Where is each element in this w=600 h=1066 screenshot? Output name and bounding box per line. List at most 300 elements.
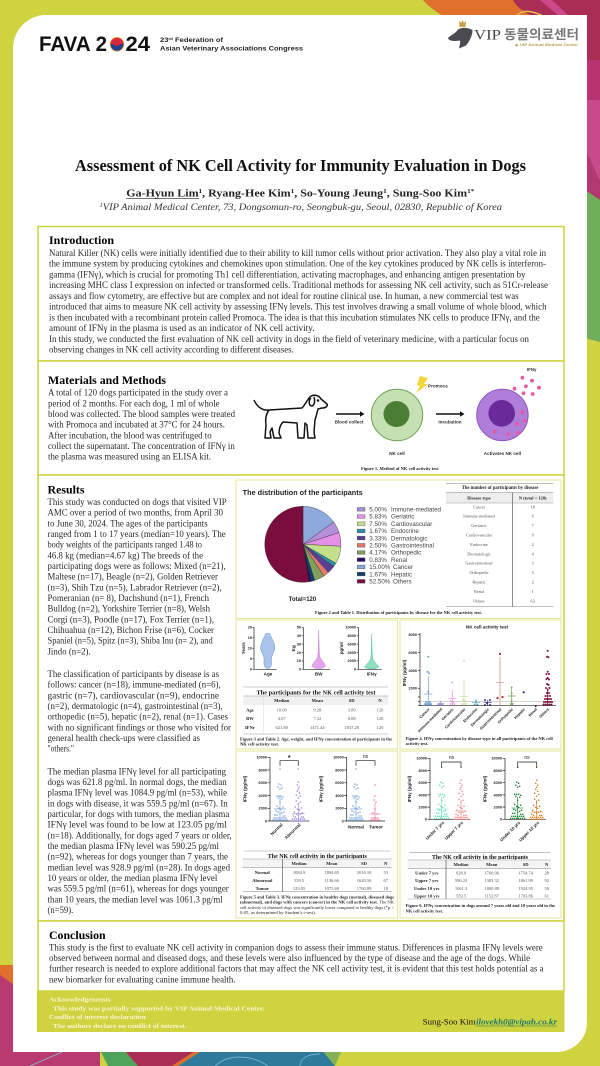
- table 2: participants: 9.28: [313, 707, 322, 712]
- authors: 1: [383, 188, 387, 195]
- table 4: NK cell activity by age: 928.9: [456, 870, 467, 875]
- dot plot: under vs upper 10 years: Under 10 yrs: [499, 820, 522, 843]
- legend: Others: [393, 578, 412, 586]
- table 1: participants by disease: Geriatric: [471, 523, 487, 528]
- violin chart: age: 0: [250, 668, 252, 672]
- icon: dog outline: [254, 395, 327, 438]
- table 3: NK cell activity: Median: [291, 861, 307, 866]
- dot plot: under vs upper 7 years: ns: [449, 755, 455, 761]
- violin chart: IFN gamma: 4000: [348, 651, 356, 655]
- text block: introduction: gamma (IFNγ), which is crucial for promoting Th1 cell differentiation, activating macrophages, and enhancing antigen presentation by: [49, 270, 526, 280]
- table 3: NK cell activity: N: [384, 861, 388, 866]
- table 4: NK cell activity by age: 559.5: [456, 893, 467, 898]
- table 3: NK cell activity: 1136.66: [324, 878, 340, 883]
- dot plot: under vs upper 10 years: 2000: [494, 806, 502, 810]
- table 3: NK cell activity: 1894.65: [324, 870, 340, 875]
- text block: disease classification: general health check-ups were classified as: [48, 733, 200, 743]
- violin chart: body weight: Kg: [291, 645, 296, 651]
- table 1: participants by disease: 9: [532, 532, 534, 538]
- text block: median IFN gamma: (n=18). Additionally, for dogs aged 7 years or older,: [48, 830, 232, 840]
- arrow: incubation: [436, 411, 464, 424]
- table 1: participants by disease: Cancer: [473, 504, 486, 509]
- caption: figure 3: [240, 737, 392, 746]
- table 1: participants by disease: 3: [532, 561, 534, 566]
- table 3: NK cell activity: [243, 851, 392, 892]
- text block: median IFN gamma: The median plasma IFNγ level for all participating: [48, 766, 226, 776]
- logo: FAVA 2024 congress: Federation of: [173, 37, 224, 44]
- table 4: NK cell activity by age: 1703.86: [518, 893, 534, 898]
- text block: study population: 46.8 kg (median=4.67 kg) The breeds of the: [48, 550, 203, 560]
- text block: median IFN gamma: 10 years or older, the median plasma IFNγ level: [48, 873, 218, 883]
- text block: conclusion: further research is needed to explore additional factors that may affect the NK cell activity test, it is evident that this test holds potential as a: [49, 964, 544, 974]
- dot plot: under vs upper 7 years: 8000: [419, 769, 427, 773]
- violin chart: age: Age: [264, 672, 273, 676]
- icon: promoca lightning: [416, 376, 448, 393]
- dot plot: disease types: Immune-mediated: [417, 707, 444, 733]
- legend: Renal: [391, 557, 407, 564]
- table 3: NK cell activity: 18: [383, 886, 389, 891]
- table 4: NK cell activity by age: The NK cell activity in the participants: [432, 855, 529, 861]
- panel: age groups: [400, 751, 561, 918]
- table 1: participants by disease: 4: [532, 551, 535, 556]
- text block: median IFN gamma: (n=92), whereas for dogs younger than 7 years, the: [48, 852, 228, 862]
- table 1: participants by disease: Gastrointestinal: [465, 561, 493, 566]
- pie total label: Total=120: [289, 597, 317, 603]
- table 2: participants: 120: [377, 707, 384, 712]
- violin chart: IFN gamma: 0: [354, 668, 356, 672]
- legend: Gastrointestinal: [391, 542, 434, 550]
- panel: introduction: [38, 226, 564, 361]
- dot plot: under vs upper 10 years: Upper 10 yrs: [518, 820, 541, 843]
- violin chart: age: 10: [248, 647, 252, 651]
- text block: disease classification: follows: cancer (n=18), immune-mediated (n=6),: [48, 680, 221, 690]
- text block: introduction: the immune system by producing cytokines and chemokines upon stimulation. One of the key cytokines produced by NK cells is interferon-: [49, 259, 546, 269]
- title: Assessment of NK Cell Activity for Immunity Evaluation in Dogs: [75, 156, 527, 175]
- table 2: participants: Mean: [312, 698, 323, 703]
- text block: study population: participating dogs were as follows: Mixed (n=21),: [48, 561, 226, 571]
- dot plot: normal vs tumor: 6000: [335, 781, 344, 785]
- legend: 5.83%: [369, 514, 387, 521]
- dot plot: normal vs abnormal: 6000: [259, 781, 267, 785]
- table 1: participants by disease: Immune-mediated: [463, 514, 496, 519]
- dot plot: normal vs abnormal: 2000: [259, 807, 267, 811]
- caption: figure 5: Figure 5 and Table 3. IFNγ concentration in healthy dogs (normal), diseased dogs: [240, 896, 395, 900]
- contact: ilovekh0@vipah.co.kr: [476, 1016, 558, 1026]
- authors: 1*: [467, 188, 474, 195]
- logo: VIP animal medical center: [448, 20, 579, 48]
- table 1: participants by disease: Cardiovascular: [466, 532, 493, 538]
- legend: [357, 506, 442, 586]
- caption: figure 4: activity test.: [406, 742, 428, 746]
- logo: FAVA 2024 congress: rd: [168, 36, 174, 41]
- table 1: participants by disease: Hepatic: [472, 580, 486, 584]
- table 1: participants by disease: 6: [532, 514, 535, 519]
- icon: dog head with crown: [448, 20, 472, 48]
- text block: median IFN gamma: plasma IFNγ level was 1084.9 pg/ml (n=53), while: [48, 788, 227, 798]
- icon: activated NK cell: Activates NK cell: [484, 451, 521, 456]
- arrow: blood collect: [335, 411, 364, 424]
- dot plot: under vs upper 10 years: 4000: [494, 793, 502, 797]
- caption: figure 6: [406, 904, 555, 913]
- dot plot: under vs upper 10 years: ns: [524, 755, 530, 761]
- table 4: NK cell activity by age: Upper 7 yrs: [415, 878, 438, 883]
- dot plot: under vs upper 7 years: 2000: [419, 806, 427, 810]
- dot plot: normal vs tumor: IFNγ (pg/ml): [319, 775, 324, 802]
- violin chart: age: 15: [248, 636, 252, 640]
- legend: 1.67%: [369, 528, 387, 535]
- table 3: NK cell activity: 1760.89: [357, 886, 372, 891]
- text block: median IFN gamma: particular, for dogs with tumors, the median plasma: [48, 809, 229, 819]
- text block: disease classification: with no significant findings or those who visited for: [48, 722, 231, 732]
- text block: introduction: assays and flow cytometry, are effective but are complex and not ideal for routine clinical use. In human, a new commercial test was: [49, 291, 519, 301]
- panel: conclusion: [38, 921, 564, 991]
- text block: study population: (n=3), Shih Tzu (n=5), Labrador Retriever (n=2),: [48, 582, 222, 592]
- authors: , Ryang-Hee Kim: [202, 188, 291, 200]
- contact: [423, 1016, 558, 1026]
- dot plot: disease types: Others: [539, 707, 550, 719]
- table 2: participants: SD: [349, 698, 355, 703]
- table 3: NK cell activity: 559.5: [294, 878, 305, 883]
- table 1: participants by disease: Others: [473, 598, 485, 603]
- affiliation: VIP Animal Medical Center, 73, Dongsomun-ro, Seongbuk-gu, Seoul, 02830, Republic of Korea: [103, 202, 502, 213]
- caption: figure 1: Figure 1. Method of NK cell activity test: [361, 467, 439, 471]
- pie chart: [265, 506, 341, 582]
- dot plot: disease types: 4000: [409, 669, 417, 673]
- text block: disease classification: orthopedic (n=5), hepatic (n=2), renal (n=1). Cases: [48, 712, 228, 722]
- text block: median IFN gamma: IFNγ level was found to be low at 123.05 pg/ml: [48, 820, 227, 830]
- table 2: participants: 4.67: [278, 716, 286, 721]
- table 1: participants by disease: Endocrine: [470, 542, 488, 547]
- text block: disease classification: (n=2), dermatologic (n=4), gastrointestinal (n=3),: [48, 701, 223, 711]
- legend: 7.50%: [369, 521, 387, 528]
- text block: conclusion: This study is the first to evaluate NK cell activity in companion dogs to assess their immune status. Differences in plasma IFNγ levels were: [49, 942, 543, 952]
- text block: methods: [48, 388, 235, 462]
- affiliation: 1: [100, 203, 103, 209]
- legend: Geriatric: [391, 514, 414, 521]
- table 4: NK cell activity by age: 1760.96: [484, 870, 500, 875]
- table 4: NK cell activity by age: [408, 852, 551, 899]
- text block: disease classification: [48, 669, 231, 754]
- dot plot: under vs upper 10 years: [483, 755, 546, 843]
- text block: median IFN gamma: was 559.5 pg/ml (n=61), whereas for dogs younger: [48, 884, 229, 894]
- violin chart: IFN gamma: [339, 626, 382, 676]
- legend: Immune-mediated: [391, 506, 442, 514]
- table 2: participants: BW: [246, 716, 254, 721]
- violin chart: body weight: 50: [297, 626, 301, 630]
- icon: promoca lightning: Promoca: [428, 383, 448, 388]
- table 2: participants: 1837.28: [344, 725, 360, 730]
- table 4: NK cell activity by age: Median: [453, 862, 469, 867]
- table 3: NK cell activity: 2016.10: [357, 870, 372, 875]
- heading: introduction: Introduction: [49, 235, 115, 247]
- dot plot: under vs upper 10 years: 6000: [494, 781, 502, 785]
- table 1: participants by disease: N (total = 120): [519, 496, 547, 500]
- logo: FAVA 2024 congress: FAVA 2: [39, 33, 107, 56]
- heading: results: Results: [48, 484, 85, 496]
- dot plot: normal vs abnormal: 4000: [259, 794, 267, 798]
- text block: study population: Corgi (n=3), Poodle (n=17), Fox Terrier (n=1),: [48, 614, 214, 624]
- violin chart: IFN gamma: IFNγ: [367, 672, 377, 676]
- dot plot: normal vs abnormal: 0: [265, 819, 267, 823]
- dot plot: disease types: Geriatric: [441, 707, 455, 721]
- legend: Cardiovascular: [391, 521, 432, 528]
- caption: figure 5: (abnormal), and dogs with cancers (cancer) in the NK cell activity test. The NK: [240, 900, 394, 904]
- text block: methods: A total of 120 dogs participated in the study over a: [48, 388, 228, 398]
- table 4: NK cell activity by age: 1754.74: [518, 870, 534, 875]
- text block: study population: to June 30, 2024. The ages of the participants: [48, 518, 208, 528]
- legend: Endocrine: [391, 528, 419, 535]
- dot plot: under vs upper 7 years: IFNγ (pg/ml): [407, 775, 412, 802]
- caption: figure 6: NK cell activity test.: [406, 909, 443, 913]
- caption: figure 4: [406, 737, 554, 746]
- violin chart: IFN gamma: 2000: [348, 659, 356, 663]
- dot plot: under vs upper 10 years: 0: [500, 818, 502, 822]
- violin chart: body weight: 10: [297, 659, 301, 663]
- table 1: participants by disease: Orthopedic: [469, 570, 489, 575]
- legend: 0.83%: [369, 557, 387, 564]
- dot plot: under vs upper 7 years: Upper 7 yrs: [444, 820, 465, 841]
- dot plot: disease types: Hepatic: [514, 707, 526, 720]
- text block: study population: [48, 497, 227, 656]
- dot plot: normal vs tumor: ns: [363, 754, 369, 760]
- table 4: NK cell activity by age: 92: [544, 878, 549, 883]
- dot plot: normal vs abnormal: Normal: [269, 822, 284, 836]
- table 4: NK cell activity by age: 28: [544, 870, 550, 875]
- text block: conclusion: observed between normal and diseased dogs, and these levels were also influenced by the type of disease and the age of the dogs. While: [49, 953, 530, 963]
- dot plot: disease types: Cardiovascular: [444, 707, 467, 730]
- text block: introduction: amount of IFNγ in the plasma is used as an indicator of NK cell activity.: [49, 323, 314, 333]
- table 1: participants by disease: Renal: [474, 589, 485, 594]
- dot plot: under vs upper 7 years: 4000: [419, 793, 427, 797]
- text block: introduction: introduced that aims to measure NK cell activity by assessing IFNγ levels. This test involves drawing a small volume of whole blood, which: [49, 302, 547, 312]
- text block: acknowledgements: This study was partially supported by VIP Animal Medical Center.: [53, 1005, 265, 1012]
- panel: age weight IFN gamma: [236, 620, 398, 749]
- table 1: participants by disease: 2: [532, 580, 534, 584]
- text block: study population: Maltese (n=17), Beagle (n=2), Golden Retriever: [48, 572, 218, 582]
- violin chart: IFN gamma: 10000: [345, 626, 356, 630]
- panel: normal diseased tumor: [236, 751, 398, 918]
- dot plot: normal vs abnormal: Abnormal: [284, 822, 302, 840]
- table 2: participants: [243, 687, 388, 734]
- table 3: NK cell activity: 53: [383, 870, 389, 875]
- icon: NK cell: NK cell: [389, 451, 405, 456]
- violin chart: body weight: [291, 626, 330, 676]
- table 2: participants: 621.80: [276, 725, 289, 730]
- text block: introduction: In this study, we conducted the first evaluation of NK cell activity in dogs in the field of veterinary medicine, with a particular focus on: [49, 334, 529, 344]
- violin chart: IFN gamma: 8000: [348, 634, 356, 638]
- caption: figure 4: Figure 4. IFNγ concentration by disease type in all participants of the NK cell: [406, 737, 554, 741]
- dot plot: under vs upper 7 years: [407, 755, 470, 841]
- text block: introduction: increasing MHC class I expression on infected or transformed cells. Traditional methods for assessing NK cell activity, such as 51Cr-release: [49, 280, 548, 290]
- table 2: participants: 7.32: [313, 716, 321, 721]
- text block: acknowledgements: The authors declare no conflict of interest.: [53, 1023, 187, 1030]
- text block: study population: Bulldog (n=2), Yorkshire Terrier (n=8), Welsh: [48, 604, 210, 614]
- dot plot: disease types: IFNγ (pg/ml): [402, 659, 407, 686]
- table 1: participants by disease: 7: [532, 523, 535, 528]
- text block: methods: After incubation, the blood was centrifuged to: [48, 430, 212, 440]
- text block: introduction: [49, 248, 548, 355]
- legend: 4.17%: [369, 550, 387, 557]
- heading: materials and methods: Materials and Methods: [48, 375, 167, 387]
- authors: 1: [291, 188, 294, 195]
- table 2: participants: The participants for the NK cell activity test: [256, 690, 376, 696]
- text block: acknowledgements: Acknowledgements: [49, 996, 111, 1003]
- text block: conclusion: [49, 942, 544, 984]
- dot plot: under vs upper 7 years: 10000: [416, 757, 427, 761]
- authors: 1: [199, 188, 202, 195]
- table 3: NK cell activity: Abnormal: [252, 878, 273, 883]
- dot plot: under vs upper 7 years: Under 7 yrs: [425, 820, 446, 841]
- table 3: NK cell activity: 1620.56: [357, 878, 372, 883]
- caption: figure 5: [240, 896, 395, 916]
- text block: median IFN gamma: in dogs with disease, it was 559.5 pg/ml (n=67). In: [48, 798, 228, 808]
- table 4: NK cell activity by age: N: [545, 862, 549, 867]
- table 1: participants by disease: 63: [531, 598, 535, 603]
- legend: 52.50%: [369, 578, 391, 586]
- table 2: participants: 8.08: [348, 716, 356, 721]
- text block: study population: This study was conducted on dogs that visited VIP: [48, 497, 227, 507]
- table 4: NK cell activity by age: SD: [523, 862, 529, 867]
- dot plot: normal vs abnormal: *: [288, 755, 291, 762]
- panel: results: [38, 475, 564, 921]
- text block: methods: blood was collected. The blood samples were treated: [48, 409, 235, 419]
- table 3: NK cell activity: 123.05: [293, 886, 306, 891]
- caption: figure 3: Figure 3 and Table 2. Age, weight, and IFNγ concentration of participants in the: [240, 737, 392, 741]
- logo: VIP animal medical center: VIP: [474, 28, 501, 44]
- caption: figure 5: cell activity of diseased dogs was significantly lower compared to healthy dogs (*p <: [240, 906, 394, 910]
- table 1: participants by disease: [446, 483, 553, 607]
- table 1: participants by disease: 2: [532, 542, 534, 547]
- table 3: NK cell activity: Normal: [255, 870, 271, 875]
- dot plot: disease types: 8000: [409, 633, 417, 637]
- icon: activated NK cell: IFNγ: [527, 367, 537, 372]
- logo: FAVA 2024 congress: 23: [160, 37, 168, 44]
- dot plot: normal vs abnormal: 10000: [256, 756, 267, 760]
- violin chart: age: [241, 626, 277, 676]
- text block: median IFN gamma: the median plasma IFNγ level was 590.25 pg/ml: [48, 841, 219, 851]
- table 3: NK cell activity: 1075.68: [324, 886, 340, 891]
- table 2: participants: 120: [377, 725, 384, 730]
- text block: conclusion: new biomarker for evaluating canine immune health.: [49, 974, 236, 984]
- dot plot: under vs upper 10 years: 10000: [491, 757, 502, 761]
- text block: introduction: is then incubated with a recombinant protein called Promoca. The idea is that this incubation stimulates NK cells to produce IFNγ, and the: [49, 312, 540, 322]
- legend: 3.33%: [369, 535, 387, 542]
- table 2: participants: Age: [246, 707, 254, 712]
- icon: NK cell: [371, 389, 423, 456]
- table 1: participants by disease: 1: [532, 589, 534, 594]
- dot plot: under vs upper 7 years: 6000: [419, 781, 427, 785]
- dot plot: normal vs tumor: 8000: [335, 768, 344, 772]
- dot plot: disease types: 2000: [409, 687, 417, 691]
- legend: 2.50%: [369, 542, 387, 550]
- text block: study population: ranged from 1 to 17 years (median=10 years). The: [48, 529, 226, 539]
- table 1: participants by disease: Disease type: [467, 496, 491, 500]
- dot plot: disease types: 6000: [409, 651, 417, 655]
- arrow: blood collect: Blood collect: [335, 420, 364, 424]
- dot plot: under vs upper 7 years: 0: [425, 818, 427, 822]
- violin chart: IFN gamma: 6000: [348, 642, 356, 646]
- table 4: NK cell activity by age: 61: [544, 893, 549, 898]
- icon: activated NK cell: [477, 367, 541, 456]
- authors: , So-Young Jeung: [294, 188, 384, 200]
- text block: disease classification: "others.": [48, 744, 74, 754]
- dot plot: normal vs tumor: Tumor: [369, 824, 383, 830]
- dot plot: normal vs tumor: [319, 754, 385, 830]
- text block: methods: period of 2 months. For each dog, 1 ml of whole: [48, 398, 220, 408]
- authors: [126, 188, 474, 200]
- table 4: NK cell activity by age: 59: [544, 886, 550, 891]
- table 4: NK cell activity by age: 1152.87: [484, 893, 500, 898]
- dot plot: normal vs tumor: 10000: [333, 756, 344, 760]
- text block: median IFN gamma: than 10 years, the median level was 1061.3 pg/ml: [48, 894, 223, 904]
- authors: Ga-Hyun Lim: [126, 188, 191, 200]
- panel: materials and methods: [38, 361, 564, 475]
- table 4: NK cell activity by age: 1800.80: [484, 886, 500, 891]
- violin chart: body weight: 20: [297, 651, 301, 655]
- panel: IFN gamma by disease type: [400, 620, 561, 749]
- table 2: participants: IFNr: [245, 725, 255, 730]
- table 2: participants: 10.00: [277, 707, 288, 712]
- text block: acknowledgements: Conflict of interest declaration: [49, 1014, 146, 1021]
- arrow: incubation: Incubation: [438, 420, 462, 424]
- text block: median IFN gamma: dogs was 621.8 pg/ml. In normal dogs, the median: [48, 777, 227, 787]
- text block: methods: collect the supernatant. The concentration of IFNγ in: [48, 441, 235, 451]
- icon: taegeuk zero: [110, 37, 124, 51]
- violin chart: age: 5: [250, 657, 252, 661]
- text block: study population: Spaniel (n=5), Spitz (n=3), Shiba Inu (n= 2), and: [48, 636, 213, 646]
- logo: FAVA 2024 congress: [39, 33, 303, 56]
- dot plot: normal vs abnormal: IFNγ (pg/ml): [243, 775, 248, 802]
- text block: introduction: Natural Killer (NK) cells were initially identified due to their ability to kill tumor cells without prior activation. They also play a vital role in: [49, 248, 546, 258]
- text block: study population: Pomeranian (n= 8), Dachshund (n=1), French: [48, 593, 209, 603]
- logo: FAVA 2024 congress: Asian Veterinary Associations Congress: [160, 46, 303, 52]
- table 4: NK cell activity by age: Mean: [486, 862, 498, 867]
- violin chart: age: 20: [248, 626, 252, 630]
- table 3: NK cell activity: 67: [383, 878, 389, 883]
- dot plot: normal vs tumor: 4000: [335, 794, 344, 798]
- table 3: NK cell activity: Tumor: [256, 886, 269, 891]
- panel: distribution of the participants: [236, 480, 561, 618]
- contact: Sung-Soo Kim: [423, 1016, 476, 1026]
- table 1: participants by disease: Dermatologic: [467, 551, 491, 556]
- caption: figure 3: NK cell activity test.: [240, 742, 279, 746]
- table 4: NK cell activity by age: Upper 10 yrs: [414, 893, 440, 898]
- text block: study population: AMC over a period of two months, from April 30: [48, 508, 223, 518]
- dot plot: normal vs tumor: Normal: [348, 824, 364, 830]
- text block: introduction: observing changes in NK cell activity according to different diseases.: [49, 345, 294, 355]
- panel: acknowledgements bar: [37, 991, 564, 1032]
- dot plot: under vs upper 10 years: IFNγ (pg/ml): [483, 775, 488, 802]
- violin chart: body weight: BW: [315, 672, 323, 676]
- table 3: NK cell activity: SD: [361, 861, 368, 866]
- table 4: NK cell activity by age: 1061.3: [455, 886, 468, 891]
- table 4: NK cell activity by age: 590.25: [455, 878, 468, 883]
- table 4: NK cell activity by age: 1383.32: [484, 878, 499, 883]
- table 4: NK cell activity by age: 1924.95: [518, 886, 534, 891]
- table 4: NK cell activity by age: 1861.99: [518, 878, 534, 883]
- dot plot: disease types: Gastrointestinal: [479, 707, 502, 731]
- authors: , Sung-Soo Kim: [387, 188, 467, 200]
- dot plot: disease types: Renal: [528, 707, 538, 718]
- text block: study population: Jindo (n=2).: [48, 646, 91, 656]
- table 2: participants: N: [378, 698, 382, 703]
- table 2: participants: 3.89: [348, 707, 356, 712]
- table 2: participants: Median: [274, 698, 290, 703]
- table 2: participants: 120: [377, 716, 384, 721]
- caption: figure 5: 0.05, as determined by Student's t-test).: [240, 911, 316, 916]
- violin chart: IFN gamma: pg/ml: [339, 642, 344, 654]
- text block: median IFN gamma: [48, 766, 232, 915]
